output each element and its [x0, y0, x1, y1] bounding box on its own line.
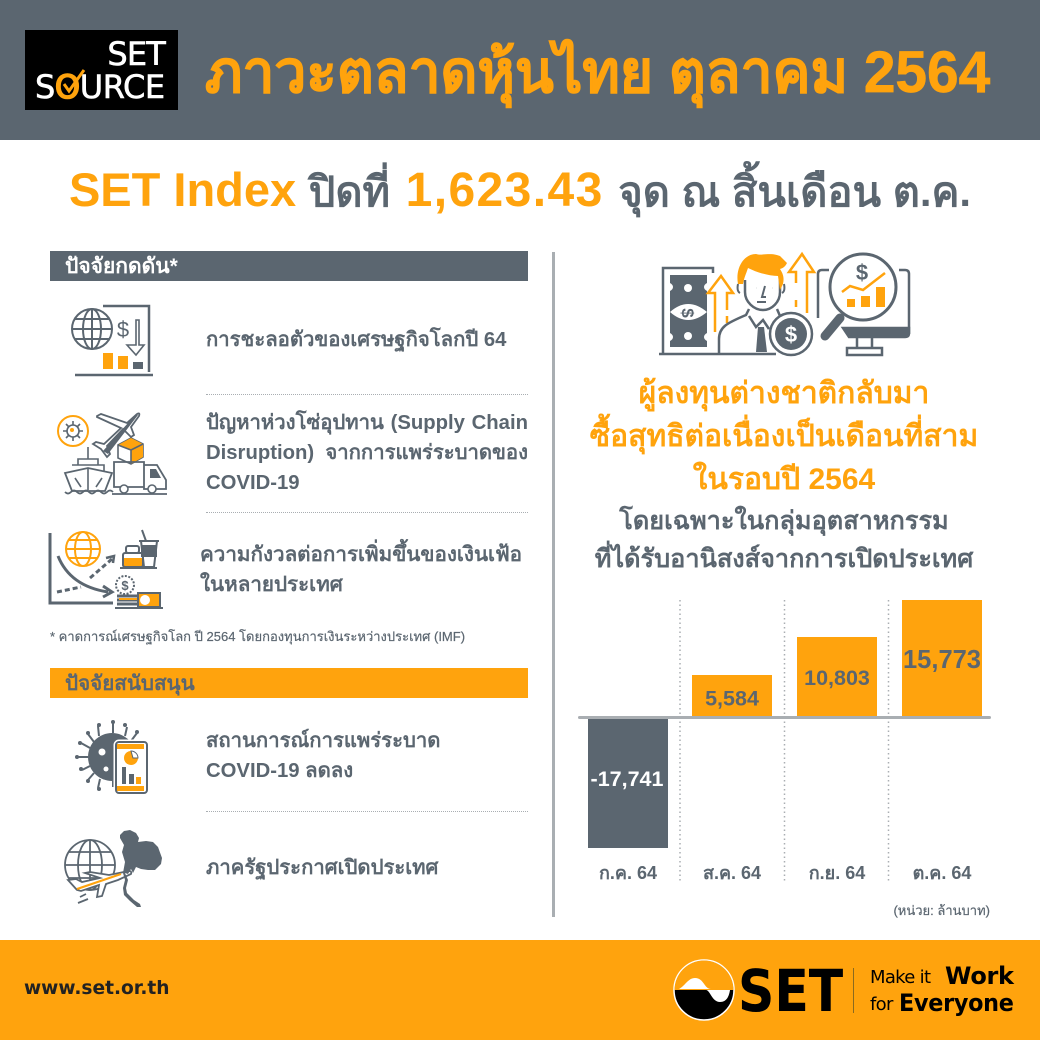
- subheadline: sectors: โดยเฉพาะในกลุ่มอุตสาหกรรม: [619, 507, 949, 535]
- factor text: supply chain disruption: Disruption) จากการแพร่ระบาดของ: [206, 442, 528, 464]
- bar: Jul: [588, 717, 668, 848]
- panel heading: supporting factors: ปัจจัยสนับสนุน: [65, 672, 195, 695]
- bar: Aug: 5,584: [705, 686, 759, 710]
- factor text: reopening: ภาครัฐประกาศเปิดประเทศ: [206, 857, 438, 879]
- factor text: supply chain disruption: [206, 410, 528, 494]
- illustration: investor: [659, 252, 910, 356]
- bar: Oct: 15,773: [903, 646, 981, 674]
- bar: Sep: [797, 637, 877, 717]
- factor text: inflation concern: [200, 538, 522, 596]
- bar: Jul: -17,741: [591, 767, 664, 791]
- factor text: inflation concern: ความกังวลต่อการเพิ่มขึ้นของเงินเฟ้อ: [200, 543, 522, 566]
- website: www.set.or.th: [24, 978, 170, 999]
- axis labels: ต.ค. 64: [913, 863, 971, 883]
- factor text: covid decline: COVID-19 ลดลง: [206, 760, 353, 782]
- tagline: for: [870, 994, 893, 1015]
- illustration: investor: $: [785, 322, 797, 347]
- bar: Aug: [692, 675, 772, 717]
- footnote: * คาดการณ์เศรษฐกิจโลก ปี 2564 โดยกองทุนการเงินระหว่างประเทศ (IMF): [50, 629, 465, 644]
- factor text: covid decline: สถานการณ์การแพร่ระบาด: [206, 730, 440, 752]
- icon: global slowdown: [71, 304, 153, 376]
- subheadline: sectors: [595, 505, 974, 573]
- headline: foreign investors: [590, 377, 978, 496]
- header band: [0, 0, 1040, 140]
- panel heading: pressure factors: [50, 251, 528, 281]
- axis labels: ส.ค. 64: [703, 863, 761, 883]
- bar: Sep: 10,803: [804, 666, 870, 690]
- tagline: Everyone: [899, 989, 1014, 1017]
- icon: covid and phone: [75, 720, 148, 794]
- icon: globe plane and Thailand map: [64, 830, 162, 907]
- factor text: covid decline: [206, 728, 440, 782]
- axis labels: ก.ค. 64: [599, 863, 657, 883]
- illustration: investor: $: [678, 308, 697, 318]
- panel heading: pressure factors: ปัจจัยกดดัน*: [65, 255, 178, 278]
- unit note: (หน่วย: ล้านบาท): [893, 903, 990, 918]
- axis labels: [599, 863, 971, 883]
- tagline: Work: [945, 962, 1014, 990]
- headline: foreign investors: ในรอบปี 2564: [693, 463, 875, 496]
- icon: inflation: [48, 530, 163, 609]
- bar: Oct: [902, 600, 982, 717]
- headline: foreign investors: ผู้ลงทุนต่างชาติกลับมา: [639, 377, 929, 410]
- factor text: inflation concern: ในหลายประเทศ: [200, 573, 343, 596]
- logo: SET SOURCE: SET: [107, 35, 165, 73]
- footer band: [0, 940, 1040, 1040]
- logo: SET SOURCE: SOURCE: [35, 68, 165, 106]
- bar chart: [578, 600, 991, 883]
- title: ภาวะตลาดหุ้นไทย ตุลาคม 2564: [205, 40, 990, 105]
- icon: global slowdown: $: [117, 317, 129, 342]
- logo text: SET: SET: [738, 957, 843, 1025]
- icon: inflation: $: [121, 578, 129, 593]
- headline: foreign investors: ซื้อสุทธิต่อเนื่องเป็นเดือนที่สาม: [590, 420, 978, 453]
- factor text: supply chain disruption: ปัญหาห่วงโซ่อุปทาน (Supply Chain: [206, 412, 528, 434]
- factor text: global slowdown: การชะลอตัวของเศรษฐกิจโลกปี 64: [206, 329, 506, 351]
- factor text: supply chain disruption: COVID-19: [206, 472, 300, 494]
- axis labels: ก.ย. 64: [809, 863, 865, 883]
- illustration: investor: $: [856, 260, 868, 285]
- logo: SET SOURCE: [25, 30, 178, 110]
- subtitle: SET Index ปิดที่ 1,623.43 จุด ณ สิ้นเดือน ต.ค.: [69, 163, 971, 217]
- icon: supply chain: [57, 412, 167, 495]
- logo: SET: [673, 959, 735, 1021]
- subheadline: sectors: ที่ได้รับอานิสงส์จากการเปิดประเทศ: [595, 545, 973, 573]
- tagline: [870, 962, 1014, 1017]
- tagline: Make it: [870, 967, 930, 988]
- panel heading: supporting factors: [50, 668, 528, 698]
